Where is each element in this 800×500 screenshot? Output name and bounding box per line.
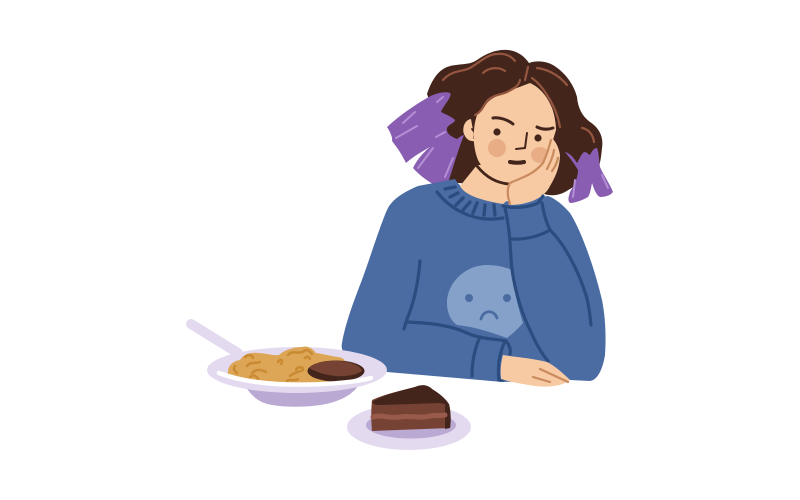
purple hair streak left <box>387 92 464 187</box>
chocolate patty <box>308 360 364 382</box>
plate rim <box>207 347 387 393</box>
hand on cheek <box>508 138 560 205</box>
rice on plate <box>228 346 346 383</box>
spoon <box>191 324 238 353</box>
face <box>474 83 556 184</box>
sweater body <box>342 179 606 382</box>
hair strands across forehead <box>475 67 560 127</box>
cake plate <box>347 404 471 450</box>
ear <box>463 119 478 141</box>
hair <box>427 50 602 195</box>
face features: eyes, brows, nose, mouth <box>493 118 553 163</box>
sweater fold lines <box>404 203 591 380</box>
neck <box>460 165 520 204</box>
sweater collar <box>437 187 503 219</box>
bowl base <box>246 386 358 407</box>
cake slice <box>371 385 451 431</box>
purple hair streak right <box>565 148 613 203</box>
plate highlight <box>219 373 371 385</box>
sad face on sweater <box>447 265 523 338</box>
lower hand <box>501 355 570 387</box>
cuff at wrist <box>503 196 543 207</box>
